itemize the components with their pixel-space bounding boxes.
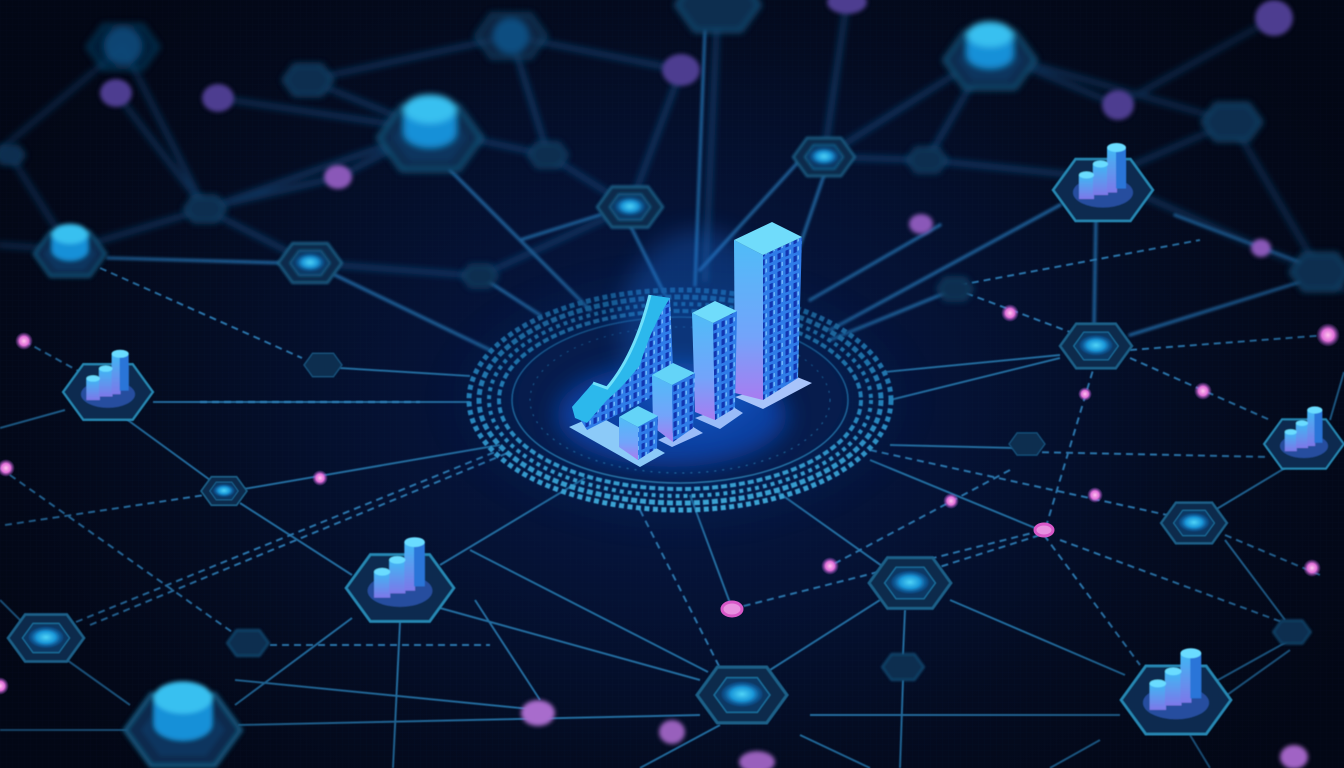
lower blurred nodes bbox=[227, 620, 1311, 680]
bars node lower left bbox=[346, 537, 454, 621]
foreground solid lines bbox=[0, 355, 1344, 768]
base plate bbox=[569, 415, 665, 467]
node left bbox=[34, 224, 106, 276]
dashed links bbox=[0, 240, 1328, 672]
bars node right top bbox=[1053, 143, 1153, 221]
upper hex nodes bbox=[278, 138, 855, 283]
rising curve block bbox=[572, 295, 673, 430]
third bar bbox=[652, 363, 695, 442]
main connection lines bbox=[108, 30, 1320, 350]
far connection lines (blurred) bbox=[0, 0, 1344, 290]
hub glow bbox=[620, 230, 780, 430]
distant blurred nodes bbox=[0, 0, 1344, 300]
node top left bbox=[378, 94, 482, 170]
central platform ring bbox=[430, 260, 930, 540]
tall bar bbox=[734, 222, 802, 400]
second bar bbox=[692, 301, 737, 420]
node bottom left bbox=[125, 681, 241, 766]
bars node lower right bbox=[1121, 648, 1231, 734]
cyan hex nodes bbox=[8, 324, 1227, 723]
node top right bbox=[944, 21, 1036, 89]
side pod nodes bbox=[34, 224, 241, 766]
bar chart nodes bbox=[63, 143, 1344, 734]
bars node left bbox=[63, 350, 153, 420]
ring dots bbox=[722, 524, 1053, 616]
hub bar chart bbox=[569, 222, 812, 467]
top pod nodes bbox=[378, 21, 1036, 170]
small bar bbox=[619, 406, 658, 460]
bars node right bbox=[1264, 406, 1344, 469]
